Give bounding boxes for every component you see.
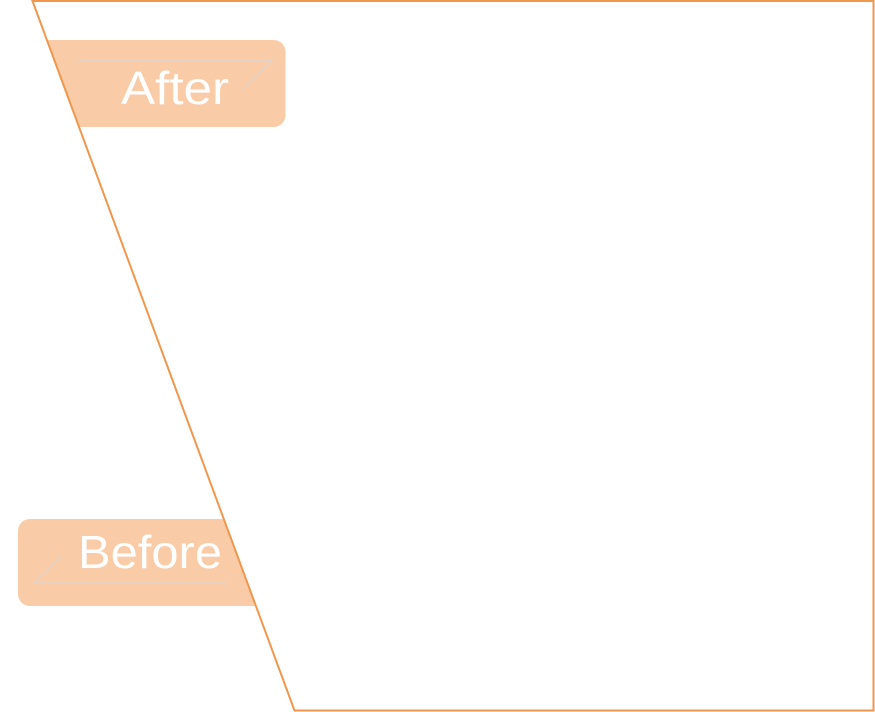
badge: Before: Before [78, 526, 222, 578]
badge: Before [18, 519, 256, 606]
badge: After: After [121, 62, 229, 114]
badge: After [47, 40, 286, 127]
